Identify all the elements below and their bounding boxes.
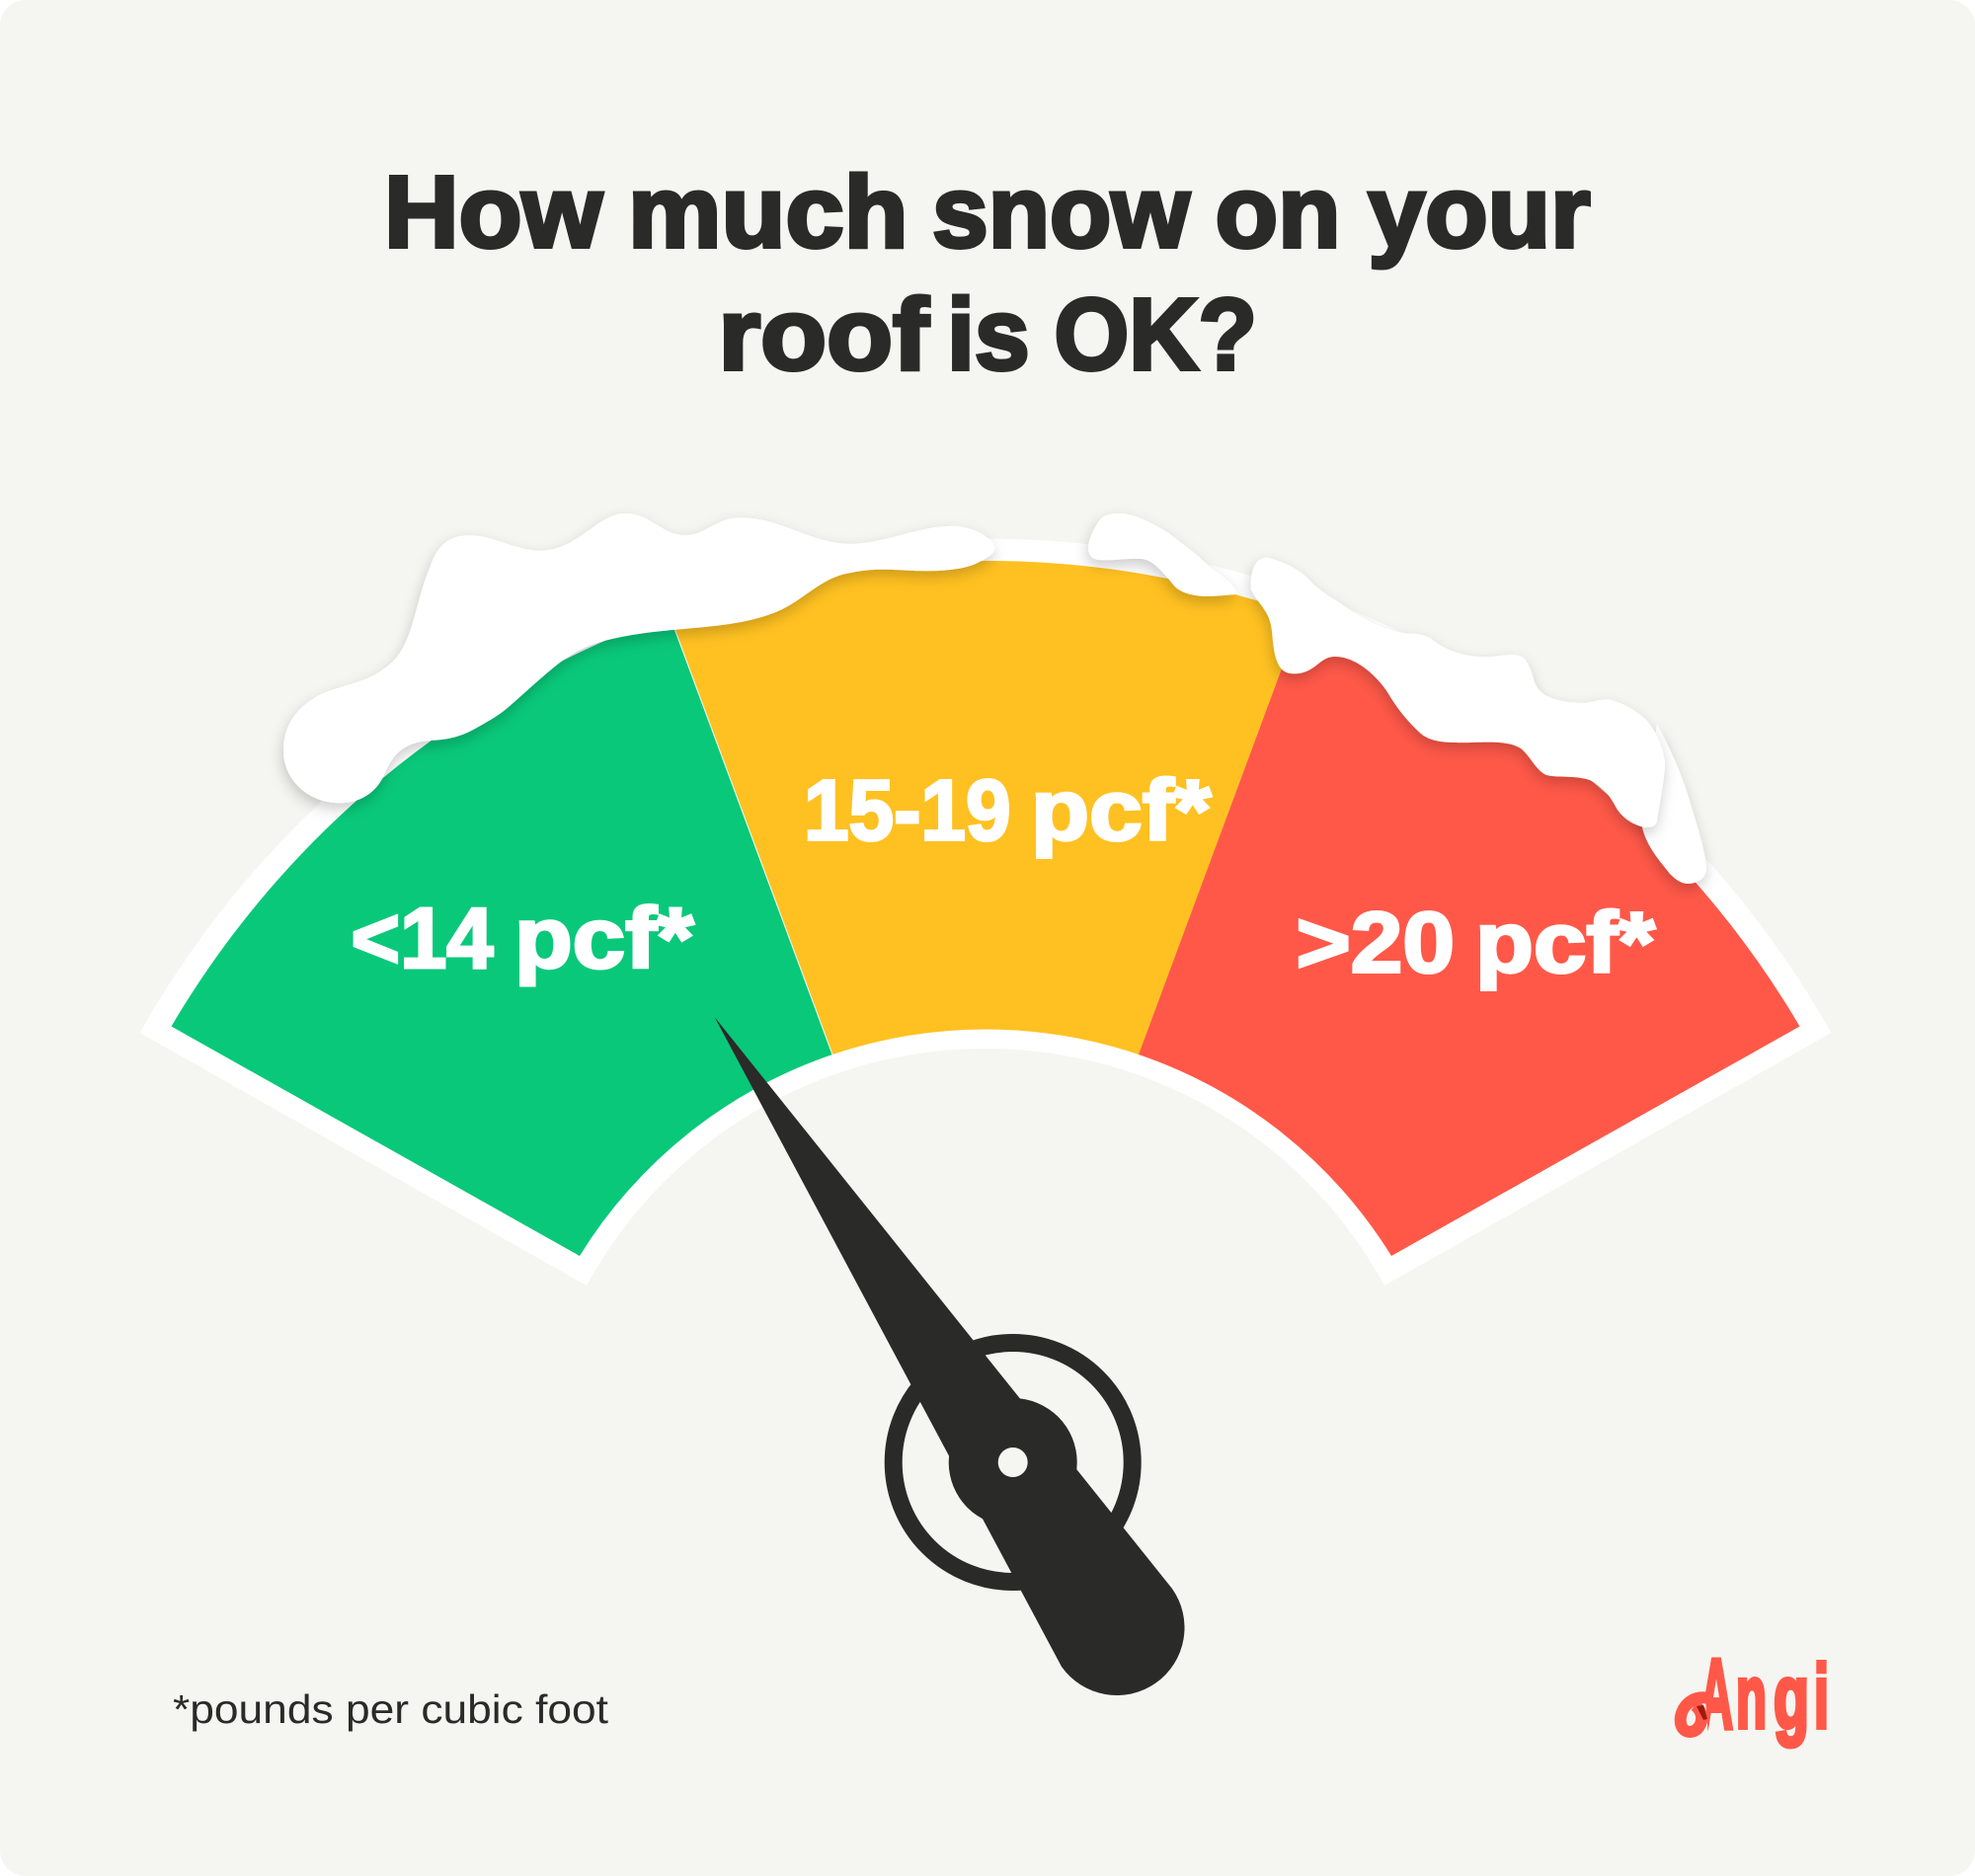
title: on xyxy=(1216,155,1341,269)
label: green range: pcf* xyxy=(514,891,694,986)
gauge segment: red xyxy=(1139,615,1799,1256)
needle hub ring xyxy=(894,1343,1133,1582)
gauge segment: green xyxy=(172,615,832,1256)
logo: Angi xyxy=(1675,1657,1827,1750)
logo letters ngi xyxy=(1736,1647,1829,1748)
title: your xyxy=(1369,155,1590,269)
title: much xyxy=(628,155,908,269)
label: yellow range xyxy=(804,762,1212,859)
logo fold shadow xyxy=(1697,1705,1707,1720)
snow: left drift xyxy=(283,513,995,803)
logo letters ngi: g xyxy=(1774,1647,1809,1748)
gauge white border xyxy=(140,539,1831,1286)
logo letters ngi: i xyxy=(1814,1647,1829,1748)
logo loop swash xyxy=(1681,1697,1708,1732)
needle hub xyxy=(949,1398,1077,1526)
footnote: *pounds per cubic foot xyxy=(173,1686,609,1732)
title: snow xyxy=(932,155,1191,269)
title: OK? xyxy=(1055,277,1257,391)
title: roof xyxy=(719,277,929,391)
logo letters ngi: n xyxy=(1736,1647,1767,1748)
title: How xyxy=(384,155,603,269)
snow: right drift xyxy=(1251,558,1665,827)
logo: Angi: A xyxy=(1699,1639,1733,1750)
gauge dial xyxy=(140,539,1831,1286)
snow: middle clump xyxy=(1088,513,1238,596)
title: is xyxy=(947,277,1030,391)
gauge needle xyxy=(715,1017,1185,1695)
title xyxy=(384,155,1590,391)
gauge segment: yellow xyxy=(670,561,1302,1055)
label: red range: >20 xyxy=(1296,895,1455,991)
label: yellow range: pcf* xyxy=(1031,762,1212,859)
label: green range xyxy=(352,891,694,986)
label: red range: pcf* xyxy=(1475,895,1655,991)
snow: right edge drip xyxy=(1641,724,1706,884)
label: red range xyxy=(1296,895,1655,991)
label: yellow range: 15-19 xyxy=(804,762,1011,859)
label: green range: <14 xyxy=(352,891,494,986)
needle hub hole xyxy=(998,1447,1028,1477)
snow on gauge xyxy=(283,513,1706,884)
needle pointer xyxy=(715,1017,1185,1695)
